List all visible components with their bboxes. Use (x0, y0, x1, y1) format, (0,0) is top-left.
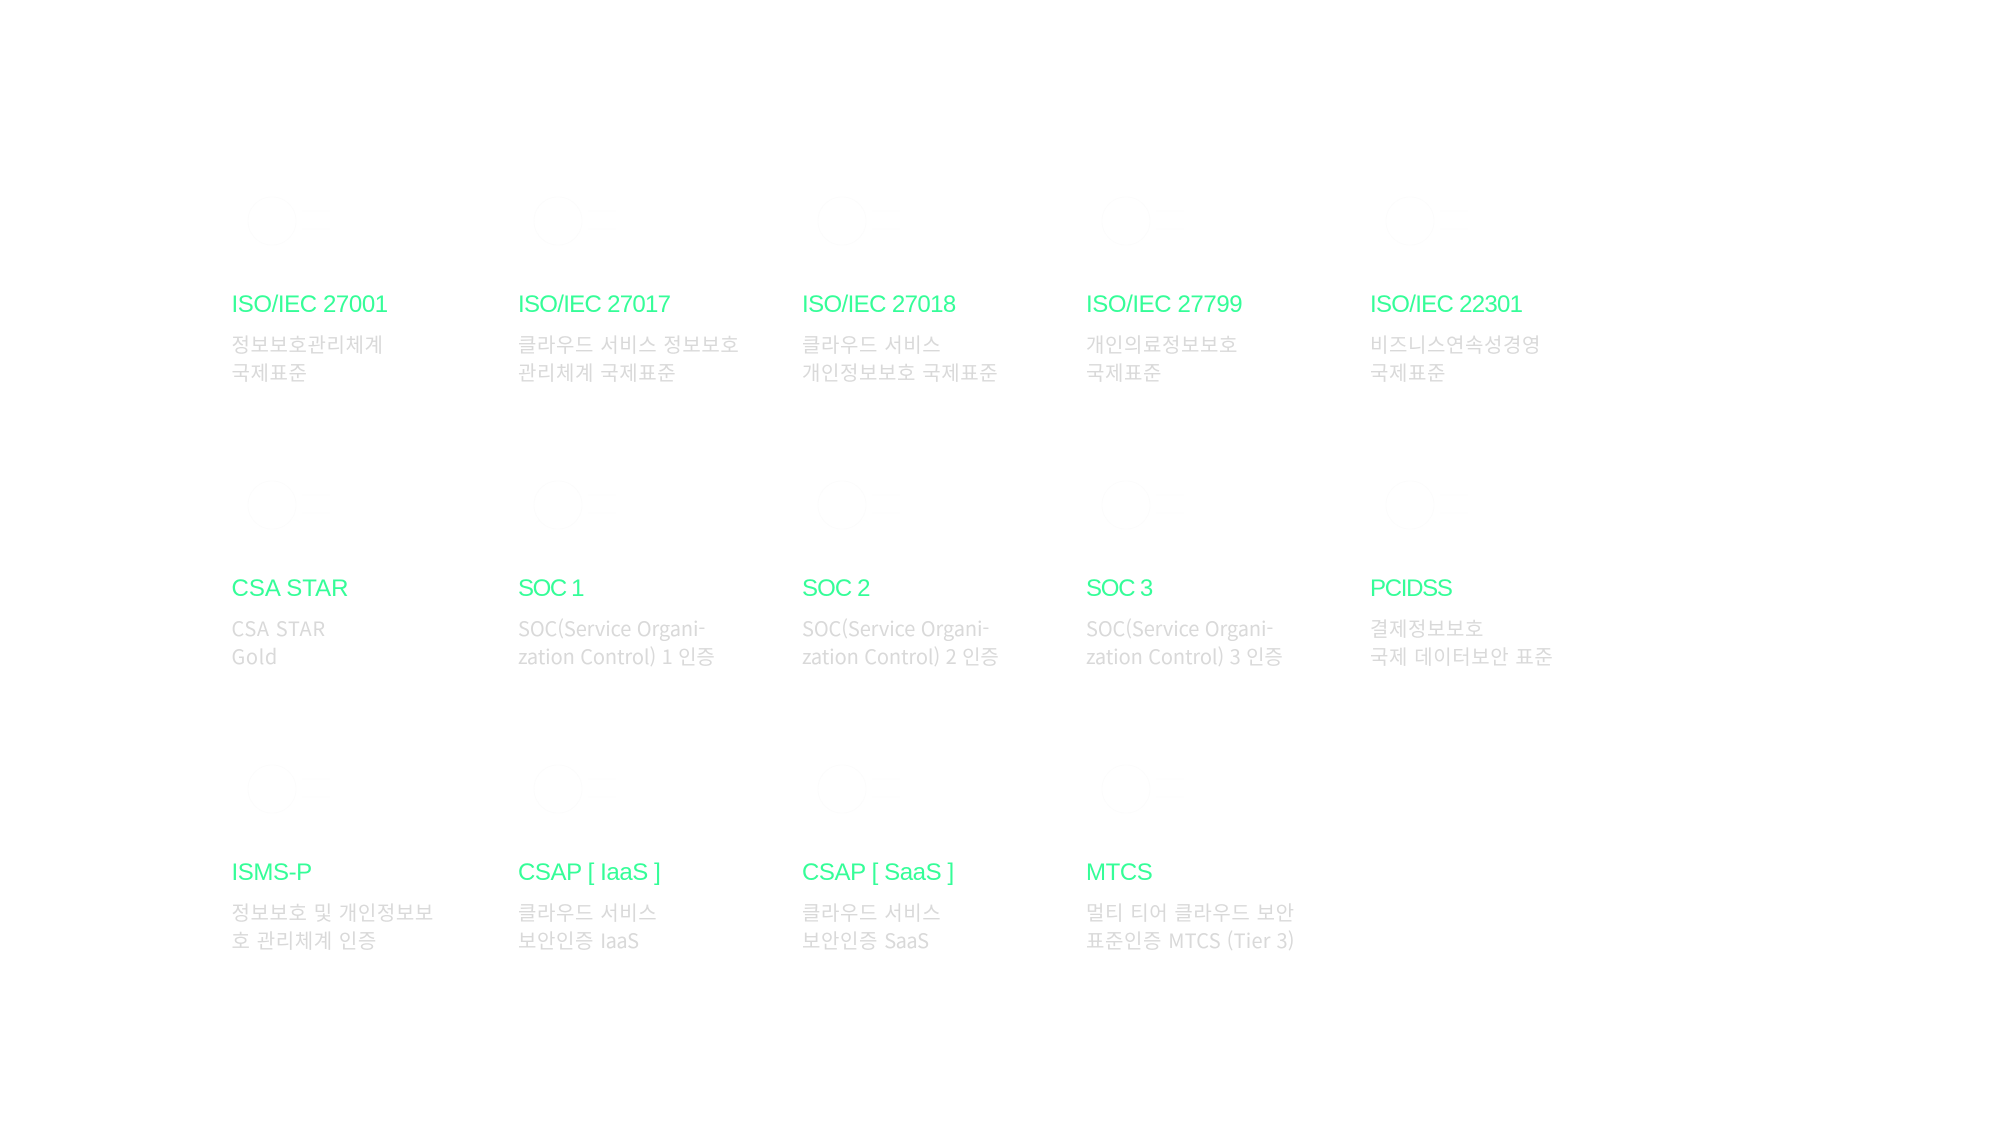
description (1086, 329, 1238, 386)
icon: SOC 3 badge (1098, 477, 1188, 533)
description: 국제표준 (1370, 357, 1446, 386)
certification: CSAP IaaS (518, 859, 660, 954)
description: 클라우드 서비스 (802, 897, 941, 926)
title: SOC 3 (1086, 575, 1152, 602)
description: SOC(Service Organi- (802, 612, 989, 642)
certification: SOC 1 (518, 575, 715, 670)
title: MTCS (1086, 859, 1152, 886)
description: CSA STAR (232, 612, 326, 642)
title: SOC 1 (518, 575, 583, 602)
certification: ISO/IEC 27799 (1086, 291, 1242, 386)
title: CSAP [ IaaS ] (518, 859, 660, 886)
icon: CSAP IaaS badge (530, 761, 620, 817)
icon: ISO/IEC 27001 badge (244, 193, 334, 249)
description: SOC(Service Organi- (1086, 612, 1273, 642)
title: CSAP [ SaaS ] (802, 859, 954, 886)
certification: ISO/IEC 27018 (802, 291, 998, 386)
icon: ISMS-P badge (244, 761, 334, 817)
description (1370, 612, 1553, 670)
title: ISMS-P (232, 859, 312, 886)
description (1370, 329, 1541, 386)
description (232, 329, 384, 386)
title: ISO/IEC 27799 (1086, 291, 1242, 318)
description: 정보보호 및 개인정보보 (232, 897, 434, 926)
certification: ISO/IEC 27017 (518, 291, 739, 386)
description: zation Control) 1 인증 (518, 641, 715, 670)
description (802, 612, 999, 670)
description: 보안인증 IaaS (518, 925, 639, 954)
title: ISO/IEC 27017 (518, 291, 670, 318)
certification: CSA STAR (232, 575, 348, 670)
icon: CSA STAR badge (244, 477, 334, 533)
title: ISO/IEC 27018 (802, 291, 956, 318)
description: 멀티 티어 클라우드 보안 (1086, 897, 1295, 926)
description: zation Control) 2 인증 (802, 641, 999, 670)
description: 클라우드 서비스 (802, 329, 941, 358)
description (1086, 898, 1295, 955)
title: SOC 2 (802, 575, 870, 602)
description: 국제표준 (1086, 357, 1162, 386)
description: 클라우드 서비스 (518, 897, 657, 926)
description: SOC(Service Organi- (518, 612, 705, 642)
icon: SOC 2 badge (814, 477, 904, 533)
icon: PCIDSS badge (1382, 477, 1472, 533)
description (1086, 612, 1283, 670)
description: 보안인증 SaaS (802, 925, 929, 954)
description (802, 897, 941, 954)
description (232, 897, 434, 954)
icon: ISO/IEC 27018 badge (814, 193, 904, 249)
description (518, 329, 739, 386)
description: 표준인증 MTCS (Tier 3) (1086, 925, 1295, 954)
description: 결제정보보호 (1370, 612, 1484, 642)
description: 정보보호관리체계 (232, 329, 384, 358)
description (518, 897, 657, 954)
icon: ISO/IEC 27799 badge (1098, 193, 1188, 249)
icon: MTCS badge (1098, 761, 1188, 817)
icon: ISO/IEC 27017 badge (530, 193, 620, 249)
title: CSA STAR (232, 575, 348, 602)
description: zation Control) 3 인증 (1086, 641, 1283, 670)
certification: ISO/IEC 27001 (232, 291, 388, 386)
description: 클라우드 서비스 정보보호 (518, 329, 739, 358)
description: 관리체계 국제표준 (518, 357, 676, 386)
certification: ISMS-P (232, 859, 434, 954)
title: ISO/IEC 27001 (232, 291, 388, 318)
certification: MTCS (1086, 859, 1295, 954)
certification: ISO/IEC 22301 (1370, 291, 1541, 386)
description (802, 329, 998, 386)
description: 개인의료정보보호 (1086, 329, 1238, 358)
certification: SOC 3 (1086, 575, 1283, 670)
title: PCIDSS (1370, 575, 1452, 602)
certification: SOC 2 (802, 575, 999, 670)
description: 호 관리체계 인증 (232, 925, 377, 954)
certification: PCIDSS (1370, 575, 1553, 670)
certification: CSAP SaaS (802, 859, 954, 954)
description: 개인정보보호 국제표준 (802, 357, 998, 386)
icon: ISO/IEC 22301 badge (1382, 193, 1472, 249)
description (518, 612, 715, 670)
title: ISO/IEC 22301 (1370, 291, 1522, 318)
description: 비즈니스연속성경영 (1370, 329, 1541, 358)
description (232, 612, 326, 670)
icon: SOC 1 badge (530, 477, 620, 533)
icon: CSAP SaaS badge (814, 761, 904, 817)
description: 국제표준 (232, 357, 308, 386)
description: Gold (232, 641, 278, 670)
description: 국제 데이터보안 표준 (1370, 641, 1553, 670)
